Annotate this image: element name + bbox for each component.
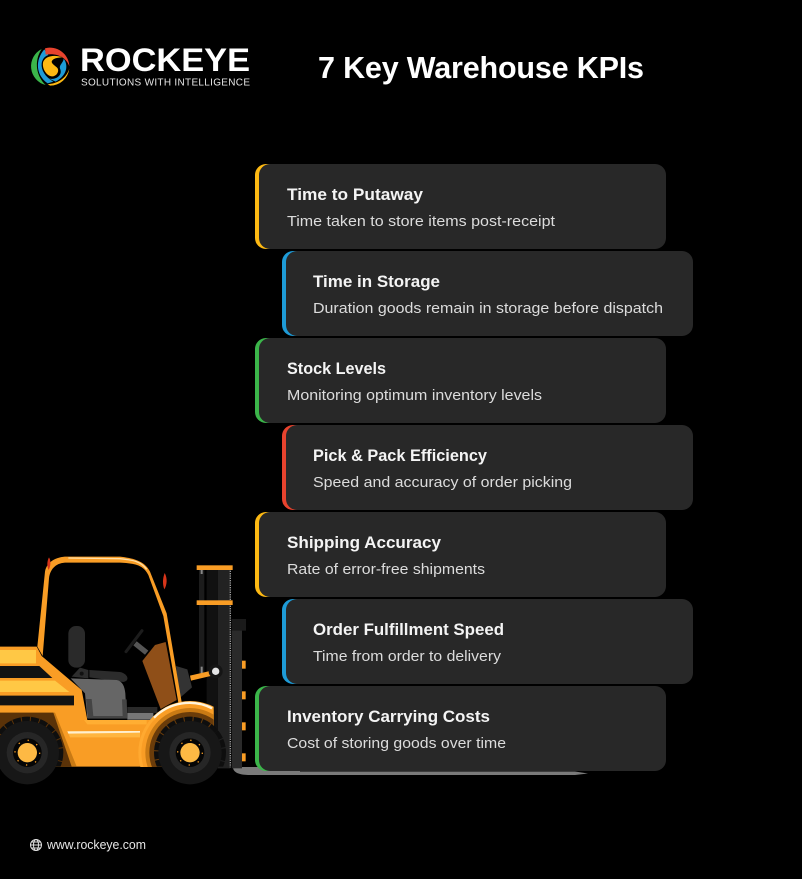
card description: Time from order to delivery	[313, 649, 502, 665]
forklift front wheel	[156, 719, 224, 786]
card title: Stock Levels	[287, 359, 386, 378]
logo	[31, 42, 250, 88]
card description: Cost of storing goods over time	[287, 736, 506, 752]
illustration: forklift	[0, 557, 246, 804]
forklift mast	[197, 565, 246, 768]
title: 7 Key Warehouse KPIs	[318, 51, 644, 85]
icon: logo swirl	[31, 48, 69, 86]
logo tagline: SOLUTIONS WITH INTELLIGENCE	[81, 78, 250, 88]
forklift dash and steering	[126, 631, 223, 709]
forklift fork	[233, 767, 588, 775]
card title: Inventory Carrying Costs	[287, 707, 490, 726]
card title: Shipping Accuracy	[287, 533, 442, 552]
card title: Order Fulfillment Speed	[313, 620, 504, 639]
card description: Rate of error-free shipments	[287, 562, 485, 578]
forklift seat	[68, 626, 157, 720]
card title: Time in Storage	[313, 272, 440, 291]
panel: Time in Storage	[282, 251, 693, 336]
card title: Pick & Pack Efficiency	[313, 446, 488, 465]
forklift cab frame	[37, 557, 182, 703]
forklift cab highlight	[68, 558, 147, 569]
panel: Order Fulfillment Speed	[282, 599, 693, 684]
card description: Monitoring optimum inventory levels	[287, 388, 542, 404]
panel: Inventory Carrying Costs	[255, 686, 666, 771]
panel: Pick & Pack Efficiency	[282, 425, 693, 510]
logo wordmark: ROCKEYE	[80, 42, 250, 78]
panel: Stock Levels	[255, 338, 666, 423]
forklift red lights	[47, 557, 167, 589]
icon: globe	[30, 840, 42, 850]
footer website	[30, 837, 146, 852]
card description: Time taken to store items post-receipt	[287, 214, 555, 230]
forklift rear wheel	[0, 719, 61, 786]
forklift body	[0, 647, 157, 767]
card description: Duration goods remain in storage before dispatch	[313, 301, 663, 317]
panel: Time to Putaway	[255, 164, 666, 249]
card title: Time to Putaway	[287, 185, 424, 204]
forklift fender	[138, 701, 214, 767]
card description: Speed and accuracy of order picking	[313, 475, 572, 491]
panel: Shipping Accuracy	[255, 512, 666, 597]
website url: www.rockeye.com	[46, 837, 146, 852]
